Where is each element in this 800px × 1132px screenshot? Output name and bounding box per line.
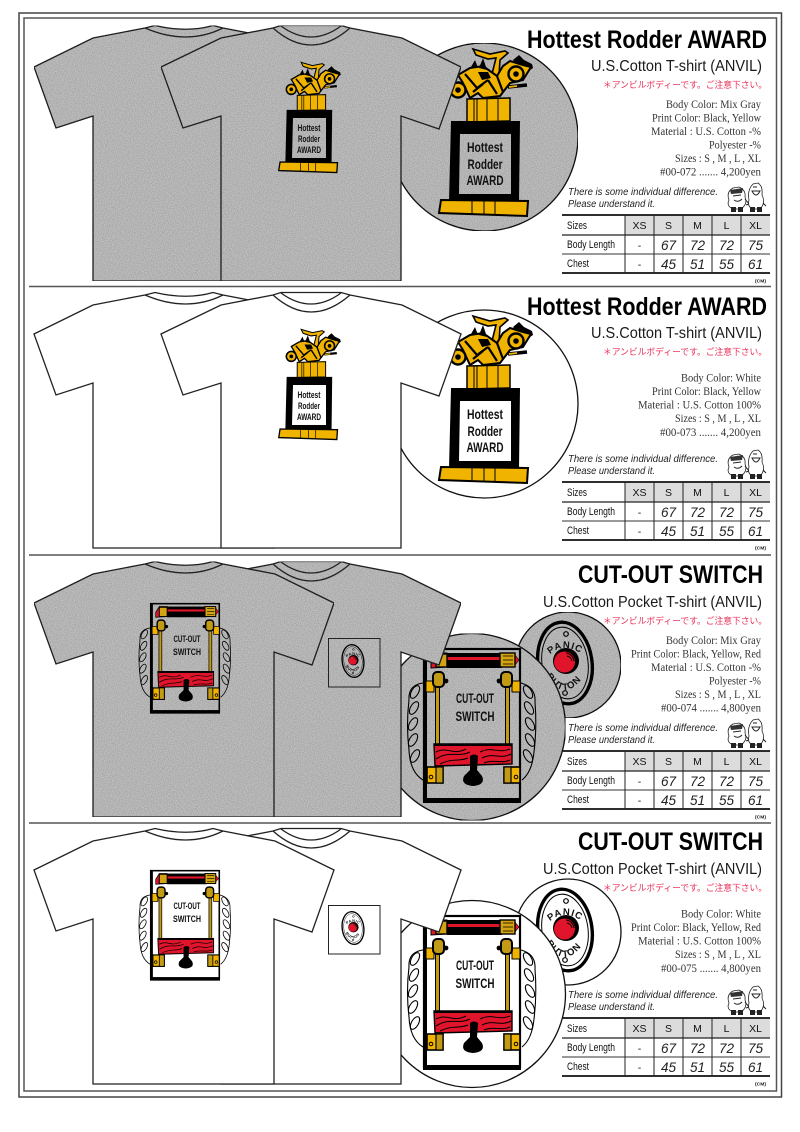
size table: Chest [567, 258, 589, 270]
size table: Sizes [567, 220, 587, 232]
product specs: #00-072 ....... 4,200yen [660, 166, 761, 178]
product specs: Print Color: Black, Yellow [652, 112, 762, 124]
size table: 45 [661, 793, 676, 808]
panic button enlarged [536, 620, 594, 706]
product title: Hottest Rodder AWARD [527, 26, 767, 54]
chest trophy print: Hottest [298, 123, 321, 133]
size table: (CM) [755, 1082, 767, 1086]
product specs [651, 99, 762, 178]
size table: 51 [690, 1060, 705, 1075]
size table: 45 [661, 1060, 676, 1075]
pocket with emblem [328, 638, 380, 688]
chest switch print [138, 603, 231, 714]
size table: 72 [690, 505, 705, 520]
individual difference note: Please understand it. [568, 465, 655, 477]
size table: Chest [567, 794, 589, 806]
pocket with emblem: BUTTON [346, 664, 360, 672]
pocket with emblem: PANIC [346, 919, 360, 924]
divider [29, 822, 771, 824]
pocket with emblem: BUTTON [346, 932, 360, 939]
individual difference note [568, 186, 718, 210]
panic button enlarged: PANIC [546, 641, 582, 654]
product subtitle: U.S.Cotton T-shirt (ANVIL) [591, 325, 762, 342]
size table: XL [749, 1023, 762, 1035]
size table: L [724, 756, 730, 768]
size table: 67 [661, 774, 676, 789]
size table: 75 [748, 1041, 763, 1056]
size table: Body Length [567, 506, 615, 518]
size table: 72 [690, 774, 705, 789]
product specs: Print Color: Black, Yellow [652, 386, 762, 398]
size table: - [638, 1043, 642, 1055]
product specs: Body Color: Mix Gray [666, 635, 761, 647]
size table: M [693, 1023, 702, 1035]
size table: 75 [748, 774, 763, 789]
enlarged trophy print: Hottest [467, 139, 503, 155]
chest trophy print: AWARD [297, 145, 321, 155]
size table: 55 [719, 793, 734, 808]
product specs: Sizes : S , M , L , XL [675, 689, 761, 701]
size table: 51 [690, 524, 705, 539]
chest switch print: CUT-OUT [174, 901, 201, 912]
product specs: #00-073 ....... 4,200yen [660, 427, 761, 439]
back shirt [34, 26, 334, 281]
enlarged trophy print: Rodder [468, 423, 503, 439]
size table: S [665, 220, 672, 232]
individual difference note [568, 989, 718, 1013]
product specs: Sizes : S , M , L , XL [675, 153, 761, 165]
zoom circle [390, 310, 578, 498]
panic button enlarged: BUTTON [550, 940, 580, 958]
size table: 67 [661, 505, 676, 520]
pocket with emblem [328, 905, 380, 954]
panel: Cut-out switch gray [34, 561, 770, 820]
individual difference note: There is some individual difference. [568, 453, 718, 465]
chest switch print: SWITCH [173, 647, 201, 658]
divider [29, 286, 771, 288]
size table: 72 [719, 774, 734, 789]
size table: L [724, 220, 730, 232]
size table: M [693, 220, 702, 232]
product specs: Sizes : S , M , L , XL [675, 949, 761, 961]
individual difference note [568, 722, 718, 746]
product title: CUT-OUT SWITCH [578, 561, 763, 589]
panel: Cut-out switch white [33, 828, 770, 1088]
small zoom circle [515, 612, 621, 718]
enlarged switch print: SWITCH [456, 709, 494, 724]
size table: 75 [748, 505, 763, 520]
icon: mascots [728, 450, 766, 479]
print shirt [34, 828, 334, 1084]
size table: (CM) [755, 278, 767, 284]
size table: Body Length [567, 775, 615, 787]
product specs: Body Color: White [681, 372, 761, 384]
size table: Sizes [567, 1023, 587, 1035]
size table: 75 [748, 238, 763, 253]
size table: 55 [719, 524, 734, 539]
icon: mascots [728, 719, 766, 748]
divider [29, 554, 771, 556]
product subtitle: U.S.Cotton Pocket T-shirt (ANVIL) [543, 861, 762, 878]
size table: (CM) [755, 814, 767, 820]
size table: XL [749, 756, 762, 768]
product specs: Polyester -% [709, 140, 761, 152]
pocket shirt [161, 828, 461, 1084]
product title: CUT-OUT SWITCH [578, 828, 763, 856]
product specs: Polyester -% [709, 676, 761, 688]
size table: Body Length [567, 1042, 615, 1054]
individual difference note: There is some individual difference. [568, 989, 718, 1001]
size table: M [693, 756, 702, 768]
size table [562, 215, 770, 284]
individual difference note: Please understand it. [568, 198, 655, 210]
size table: Chest [567, 525, 589, 537]
panic button enlarged [536, 888, 594, 972]
pocket shirt [161, 562, 461, 817]
large zoom circle [378, 900, 566, 1088]
product specs [631, 908, 761, 975]
enlarged trophy print: AWARD [466, 439, 504, 455]
enlarged trophy print: AWARD [466, 172, 504, 188]
large zoom circle [378, 634, 566, 820]
size table: 55 [719, 257, 734, 272]
enlarged trophy print: Rodder [468, 156, 503, 172]
size table: - [638, 240, 642, 252]
product specs: Material : U.S. Cotton -% [651, 662, 761, 674]
red notice: ＊アンビルボディーです。ご注意下さい。 [603, 79, 767, 90]
enlarged trophy print: Hottest [467, 406, 503, 422]
product specs: Material : U.S. Cotton -% [651, 126, 761, 138]
enlarged switch print: CUT-OUT [456, 691, 494, 706]
size table: 61 [748, 257, 763, 272]
size table: M [693, 487, 702, 499]
size table: 72 [719, 238, 734, 253]
size table: S [665, 1023, 672, 1035]
size table: - [638, 776, 642, 788]
chest switch print: SWITCH [173, 914, 201, 925]
chest trophy print [279, 62, 341, 173]
size table: 72 [719, 505, 734, 520]
product specs: Body Color: White [681, 908, 761, 920]
size table: XL [749, 220, 762, 232]
size table: - [638, 507, 642, 519]
size table: (CM) [755, 546, 767, 550]
size table: 67 [661, 1041, 676, 1056]
product title: Hottest Rodder AWARD [527, 293, 767, 321]
individual difference note: There is some individual difference. [568, 722, 718, 734]
product specs: #00-074 ....... 4,800yen [661, 702, 761, 714]
product specs: Print Color: Black, Yellow, Red [631, 922, 761, 934]
individual difference note [568, 453, 718, 477]
panel: Hottest Rodder white [34, 292, 770, 550]
product specs: Body Color: Mix Gray [666, 99, 761, 111]
size table: 61 [748, 793, 763, 808]
size table: 72 [690, 1041, 705, 1056]
chest switch print [138, 870, 231, 981]
size table: 51 [690, 793, 705, 808]
size table: Body Length [567, 239, 615, 251]
product specs: #00-075 ....... 4,800yen [661, 963, 761, 975]
icon: mascots [728, 986, 766, 1015]
chest trophy print: Rodder [298, 401, 320, 411]
size table: XL [749, 487, 762, 499]
individual difference note: There is some individual difference. [568, 186, 718, 198]
enlarged trophy print [439, 49, 533, 216]
enlarged switch print: SWITCH [456, 976, 494, 991]
size table [562, 751, 770, 820]
panel: Hottest Rodder gray [34, 26, 770, 284]
chest trophy print: Rodder [298, 134, 320, 144]
panic button enlarged: PANIC [546, 908, 582, 921]
red notice: ＊アンビルボディーです。ご注意下さい。 [603, 882, 767, 893]
chest trophy print: Hottest [298, 390, 321, 400]
back shirt [34, 292, 334, 548]
enlarged switch print [406, 648, 537, 803]
size table: 45 [661, 524, 676, 539]
size table: XS [632, 756, 647, 768]
size table: - [638, 259, 642, 271]
size table: XS [632, 487, 647, 499]
size table: 61 [748, 1060, 763, 1075]
size table [562, 482, 770, 550]
pocket with emblem: PANIC [346, 652, 360, 658]
size table: 55 [719, 1060, 734, 1075]
size table: - [638, 795, 642, 807]
product specs: Sizes : S , M , L , XL [675, 413, 761, 425]
front shirt [161, 292, 461, 548]
product specs: Material : U.S. Cotton 100% [638, 936, 761, 948]
size table: L [724, 1023, 730, 1035]
size table: XS [632, 220, 647, 232]
product subtitle: U.S.Cotton Pocket T-shirt (ANVIL) [543, 594, 762, 611]
size table: 51 [690, 257, 705, 272]
product subtitle: U.S.Cotton T-shirt (ANVIL) [591, 58, 762, 75]
print shirt [34, 562, 334, 817]
size table: Sizes [567, 756, 587, 768]
individual difference note: Please understand it. [568, 1001, 655, 1013]
size table: - [638, 526, 642, 538]
product specs [638, 372, 762, 439]
size table: 61 [748, 524, 763, 539]
panic button enlarged: BUTTON [550, 672, 580, 690]
red notice: ＊アンビルボディーです。ご注意下さい。 [603, 615, 767, 626]
size table [562, 1018, 770, 1086]
size table: S [665, 487, 672, 499]
enlarged switch print [406, 915, 537, 1070]
product specs: Print Color: Black, Yellow, Red [631, 648, 761, 660]
red notice: ＊アンビルボディーです。ご注意下さい。 [603, 346, 767, 357]
front shirt [161, 26, 461, 281]
chest trophy print [279, 329, 341, 440]
size table: 72 [690, 238, 705, 253]
small zoom circle [515, 879, 621, 985]
product specs: Material : U.S. Cotton 100% [638, 400, 761, 412]
size table: 72 [719, 1041, 734, 1056]
zoom circle [390, 43, 578, 231]
size table: L [724, 487, 730, 499]
icon: mascots [728, 183, 766, 212]
size table: XS [632, 1023, 647, 1035]
size table: S [665, 756, 672, 768]
enlarged switch print: CUT-OUT [456, 958, 494, 973]
size table: Chest [567, 1061, 589, 1073]
product specs [631, 635, 761, 714]
enlarged trophy print [439, 316, 533, 483]
chest switch print: CUT-OUT [174, 634, 201, 645]
size table: Sizes [567, 487, 587, 499]
size table: 45 [661, 257, 676, 272]
individual difference note: Please understand it. [568, 734, 655, 746]
size table: 67 [661, 238, 676, 253]
size table: - [638, 1062, 642, 1074]
chest trophy print: AWARD [297, 412, 321, 422]
